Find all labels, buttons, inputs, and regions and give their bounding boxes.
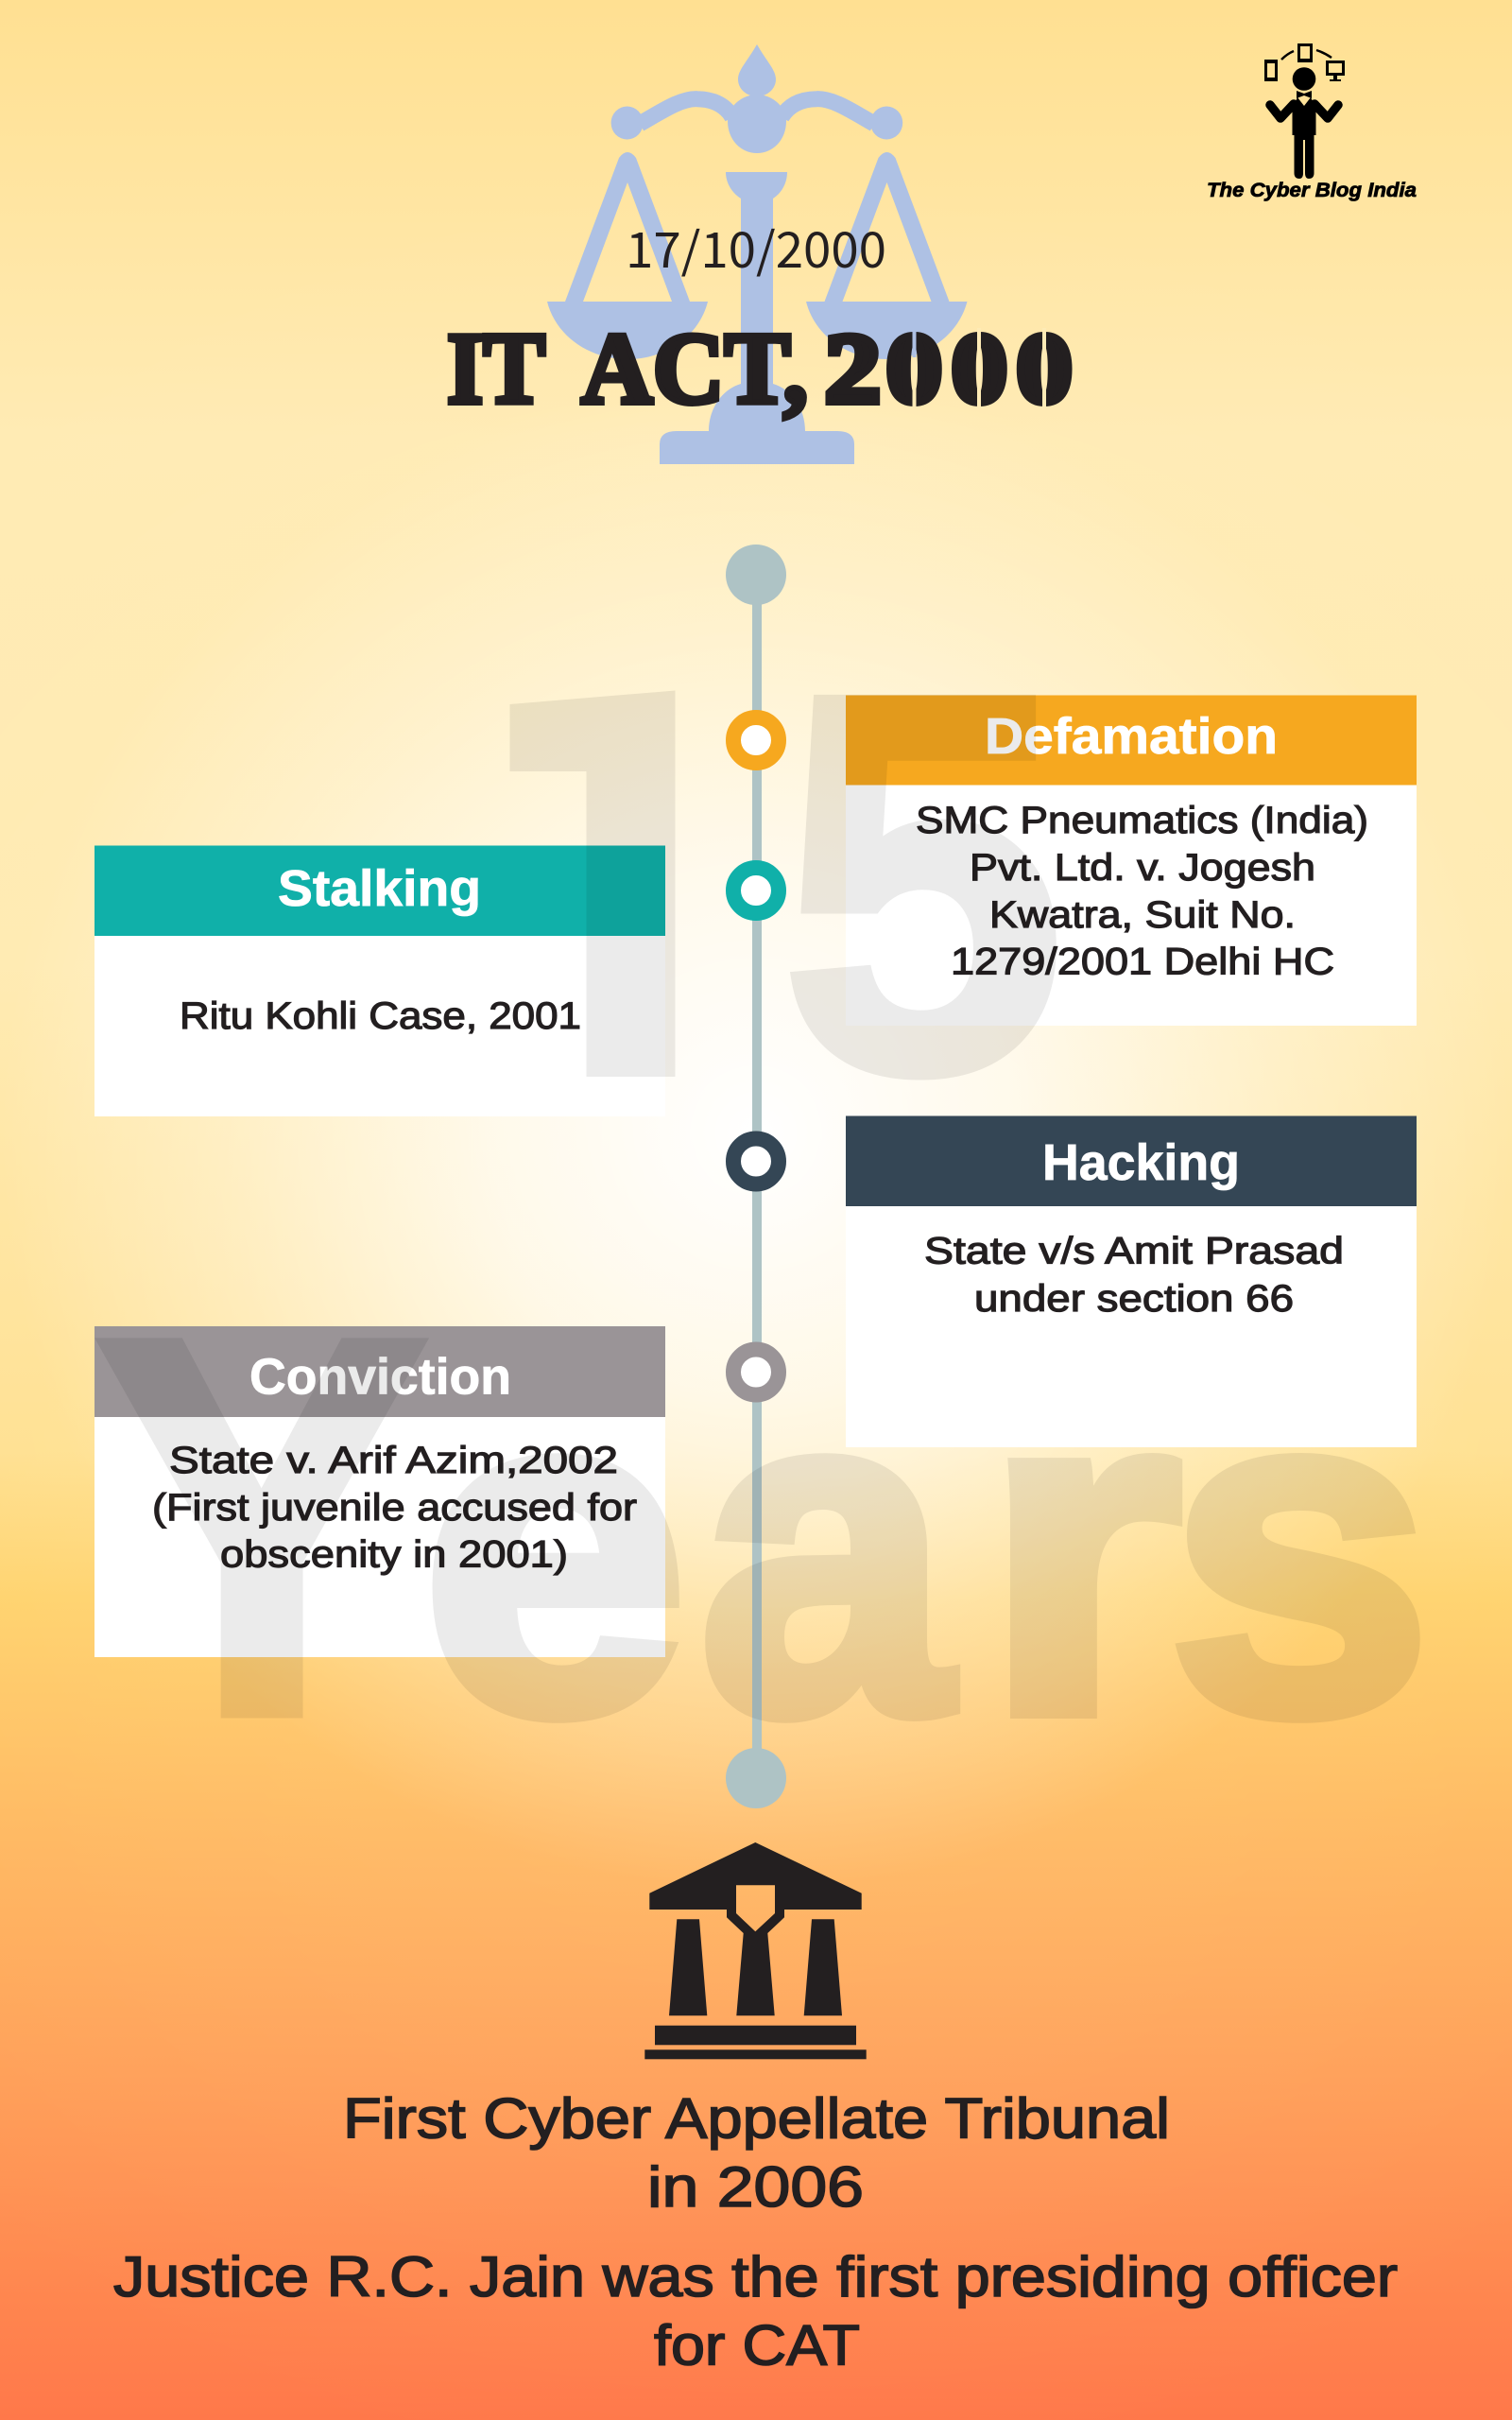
text: justice r.c. jain: Justice R.C. Jain was the first presiding officer [113,2245,1398,2308]
title [447,313,1073,425]
date: 17/10/2000 [626,211,886,282]
case text: defamation: SMC Pneumatics (India) [916,800,1368,841]
text: first cyber appellate tribunal: in 2006 [647,2155,864,2219]
watermark: 15 Years: a [699,1289,953,1810]
case text: defamation: Kwatra, Suit No. [989,894,1296,936]
text: justice r.c. jain: for CAT [654,2314,860,2377]
case text: conviction [152,1440,637,1575]
title: 2000 [825,315,1073,424]
node: hacking [733,1138,779,1184]
heading: hacking: Hacking [1042,1134,1240,1191]
text: first cyber appellate tribunal: First Cyber Appellate Tribunal [343,2087,1170,2150]
text: justice r.c. jain [113,2245,1398,2377]
panel: hacking [846,1115,1417,1447]
node: stalking [733,868,779,913]
case text: defamation [916,800,1368,983]
watermark: 15 Years: Y [95,1228,428,1827]
timeline end node [726,1748,786,1808]
heading: conviction: Conviction [249,1348,511,1405]
title: IT [447,313,545,425]
panel: stalking [94,845,665,1116]
icon: scales of justice [547,44,968,464]
heading: defamation: Defamation [985,708,1278,765]
case text: stalking: Ritu Kohli Case, 2001 [180,995,581,1037]
node: defamation [733,717,779,763]
title: ACT, [581,313,808,425]
case text: hacking [924,1231,1344,1320]
text: first cyber appellate tribunal [343,2087,1170,2219]
icon: tribunal building [644,1842,867,2059]
node: conviction [733,1350,779,1395]
case text: defamation: Pvt. Ltd. v. Jogesh [970,847,1315,889]
case text: hacking: under section 66 [974,1278,1294,1320]
case text: defamation: 1279/2001 Delhi HC [951,942,1334,983]
watermark: 15 Years: 5 [781,585,1065,1184]
case text: conviction: obscenity in 2001) [220,1533,568,1575]
logo: The Cyber Blog India [1207,43,1417,201]
panel: defamation [846,696,1417,1026]
case text: conviction: State v. Arif Azim,2002 [169,1440,618,1481]
logo: The Cyber Blog India: The Cyber Blog India [1207,180,1417,201]
watermark: 15 Years [94,690,1419,1723]
watermark: 15 Years: r [983,1290,1182,1810]
watermark: 15 Years: e [421,1290,688,1809]
timeline [726,544,786,1808]
heading: stalking: Stalking [278,860,481,917]
case text: conviction: (First juvenile accused for [152,1487,637,1529]
watermark: 15 Years: s [1168,1290,1432,1810]
case text: hacking: State v/s Amit Prasad [924,1231,1344,1272]
timeline start node [726,544,786,605]
watermark: 15 Years: 1 [435,554,809,1200]
panel: conviction [94,1326,665,1657]
